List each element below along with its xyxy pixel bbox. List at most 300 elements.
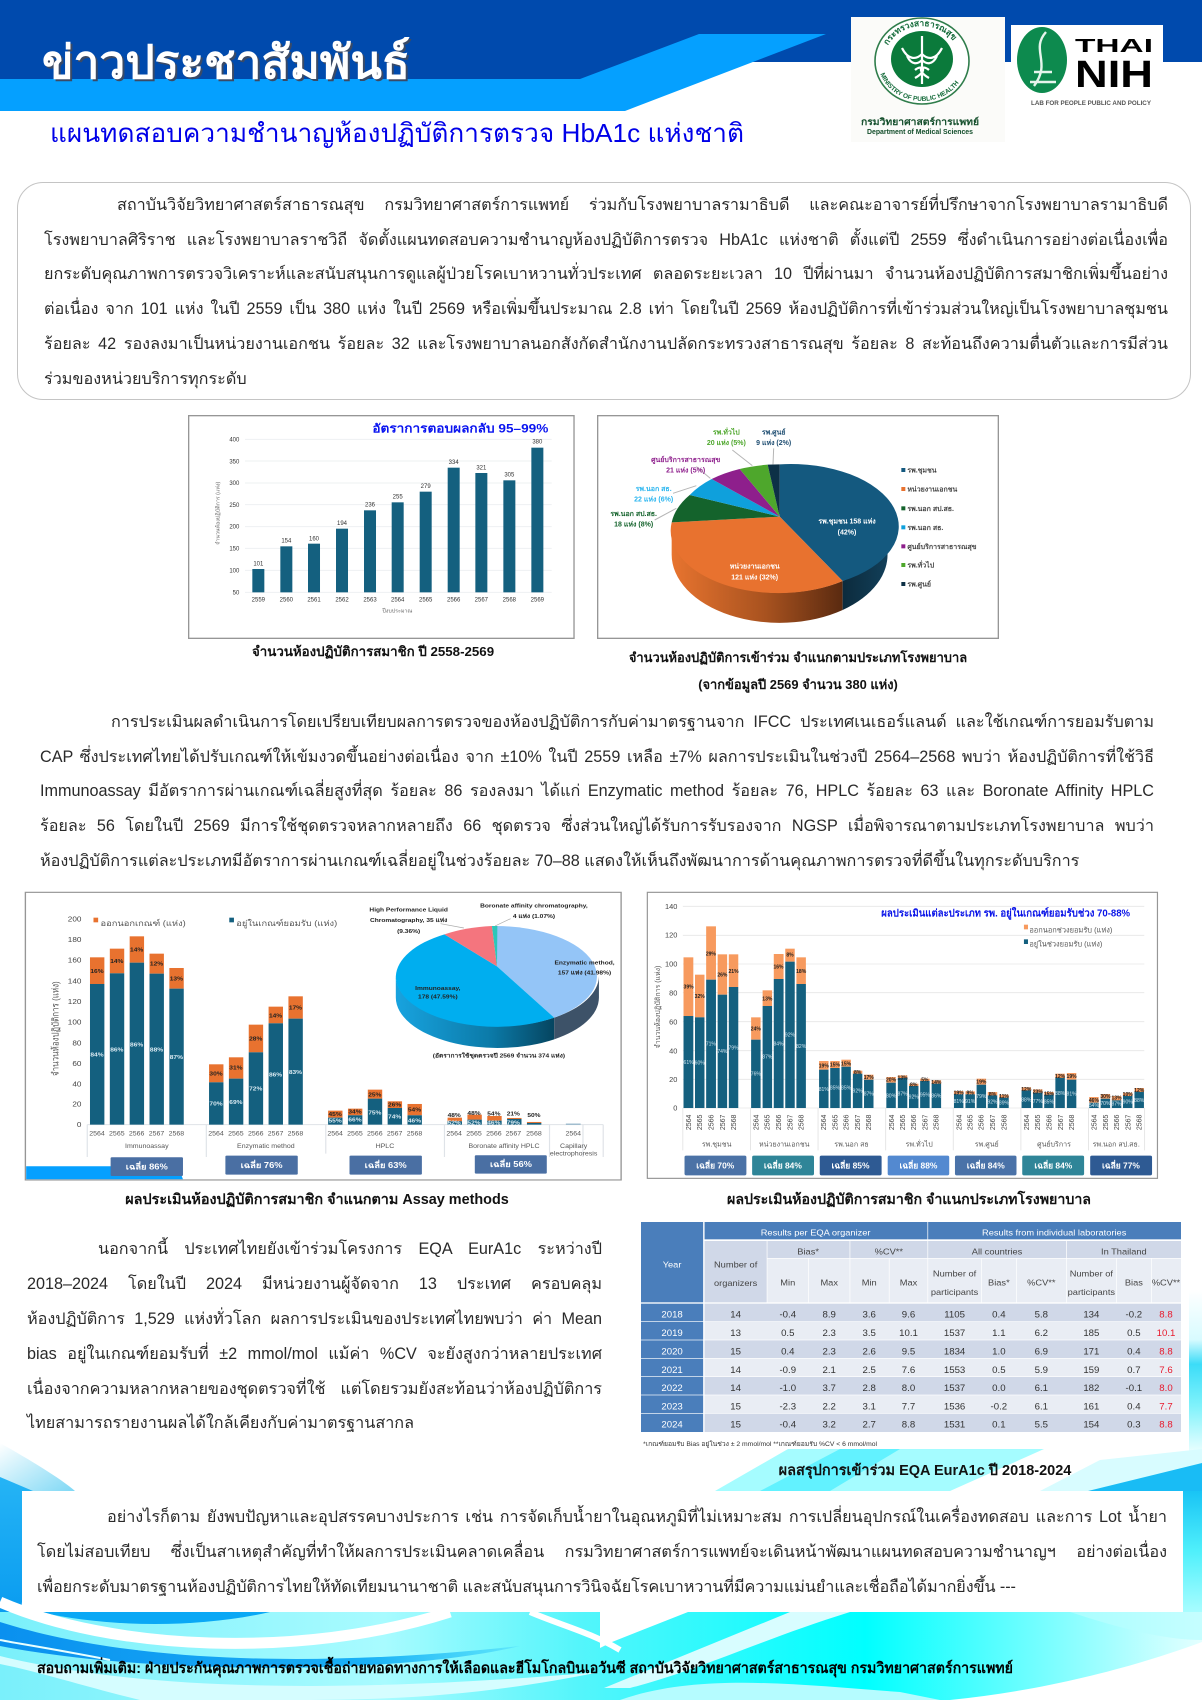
x axis labels bbox=[252, 598, 545, 604]
table header text: Bias* bbox=[988, 1278, 1011, 1287]
bar value labels: 321 bbox=[476, 466, 487, 472]
percent labels out of range: 8% bbox=[854, 1070, 862, 1076]
percent labels out of range: 12% bbox=[1022, 1087, 1032, 1093]
chart: assay methods bbox=[24, 892, 622, 1181]
average boxes: เฉลี่ย 56% bbox=[490, 1157, 532, 1168]
rotated year labels: 2565 bbox=[833, 1114, 840, 1130]
percent labels out of range: 17% bbox=[864, 1075, 875, 1081]
caption: participants by hospital type bbox=[629, 650, 967, 693]
right strip bbox=[1189, 1290, 1202, 1455]
table header text: Number of bbox=[1070, 1268, 1114, 1278]
y axis labels bbox=[67, 915, 81, 1128]
legend: ออกนอกเกณฑ์ (แห่ง) bbox=[100, 918, 186, 928]
y axis labels: 140 bbox=[665, 902, 678, 911]
percent labels out of range bbox=[684, 951, 1145, 1104]
axis titles: จำนวนห้องปฏิบัติการ (แห่ง) bbox=[214, 482, 221, 545]
pie labels: 9 แห่ง (2%) bbox=[756, 439, 792, 447]
panel: EQA EurA1c paragraph: ห้องปฏิบัติการ 1,529 แห่งทั่วโลก ผลการประเมินของประเทศไทยพบว่า ค่า Mean bbox=[27, 1310, 602, 1328]
y axis labels: 120 bbox=[67, 997, 81, 1006]
chart: hospital type evaluation bbox=[646, 892, 1158, 1179]
panel: EQA EurA1c paragraph: 2018–2024 โดยในปี 2024 มีหน่วยงานผู้จัดจาก 13 ประเทศ ครอบคลุม bbox=[27, 1275, 602, 1293]
rotated year labels: 2564 bbox=[686, 1114, 693, 1130]
table rows: -0.4 bbox=[780, 1420, 796, 1429]
percent labels in range: 79% bbox=[506, 1119, 520, 1126]
average boxes: เฉลี่ย 70% bbox=[697, 1158, 735, 1170]
percent labels in range: 81% bbox=[819, 1087, 830, 1093]
x axis years: 2567 bbox=[267, 1130, 283, 1137]
pie labels: รพ.นอก สป.สธ. bbox=[611, 510, 657, 518]
pie labels: รพ.นอก สธ. bbox=[636, 486, 672, 493]
y axis labels bbox=[229, 437, 240, 596]
percent labels in range: 86% bbox=[110, 1047, 124, 1053]
percent labels out of range: 15% bbox=[1044, 1091, 1055, 1097]
x axis labels: 2567 bbox=[475, 598, 489, 604]
y axis labels: 50 bbox=[233, 590, 240, 596]
table rows: 0.4 bbox=[781, 1346, 795, 1356]
table rows: 8.0 bbox=[902, 1383, 916, 1393]
average boxes bbox=[685, 1155, 1152, 1175]
average boxes: เฉลี่ย 76% bbox=[240, 1158, 283, 1169]
panel: evaluation paragraph bbox=[40, 712, 1154, 870]
rotated year labels: 2567 bbox=[720, 1114, 727, 1130]
logo: thai nih: THAI bbox=[1075, 36, 1153, 56]
panel: evaluation paragraph: CAP ซึ่งประเทศไทยได้ปรับเกณฑ์ให้เข้มงวดขึ้นอย่างต่อเนื่อง จาก ±10% ในปี 2559 เหลือ ±7% ผลการประเมินในช่วงปี 2564–2568 พบว่า ห้องปฏิบัติการที่ใช้วิธี bbox=[40, 748, 1154, 766]
logo: ministry of public health bbox=[851, 17, 1005, 136]
percent labels in range: 70% bbox=[1101, 1101, 1111, 1107]
table rows: 8.8 bbox=[1160, 1310, 1173, 1319]
rotated year labels: 2564 bbox=[754, 1114, 761, 1130]
legend: อยู่ในช่วงยอมรับ (แห่ง) bbox=[1030, 939, 1103, 948]
percent labels in range: 69% bbox=[229, 1099, 243, 1106]
percent labels in range: 79% bbox=[729, 1045, 740, 1051]
y axis labels: 60 bbox=[670, 1017, 678, 1026]
percent labels in range: 83% bbox=[289, 1069, 302, 1076]
rotated year labels: 2566 bbox=[709, 1114, 716, 1130]
percent labels in range: 52% bbox=[447, 1120, 461, 1126]
rotated year labels: 2567 bbox=[1126, 1114, 1133, 1130]
logo: thai nih: NIH bbox=[1075, 54, 1153, 96]
y axis labels: 350 bbox=[229, 459, 240, 465]
percent labels in range: 82% bbox=[796, 1044, 807, 1050]
caption: EQA summary: ผลสรุปการเข้าร่วม EQA EurA1c ปี 2018-2024 bbox=[779, 1463, 1071, 1479]
y axis labels: 250 bbox=[229, 503, 240, 509]
y axis labels: 150 bbox=[229, 547, 240, 553]
stacked bars: out of range bbox=[684, 926, 1144, 1102]
banner light blue ribbon bbox=[0, 34, 826, 111]
table rows: 0.4 bbox=[993, 1310, 1006, 1319]
percent labels out of range: 16% bbox=[774, 964, 784, 970]
table rows: 14 bbox=[731, 1310, 741, 1319]
x axis years: 2565 bbox=[109, 1130, 125, 1137]
table header text: All countries bbox=[972, 1247, 1023, 1256]
chart title: อัตราการตอบผลกลับ 95–99% bbox=[372, 422, 549, 436]
table header text bbox=[663, 1228, 1181, 1297]
table rows: 154 bbox=[1084, 1420, 1100, 1429]
legend: ออกนอกช่วงยอมรับ (แห่ง) bbox=[1030, 925, 1113, 934]
table rows: 1.0 bbox=[993, 1346, 1006, 1356]
percent labels in range: 87% bbox=[898, 1091, 909, 1097]
x axis years: 2567 bbox=[148, 1130, 164, 1137]
rotated year labels: 2564 bbox=[889, 1114, 896, 1130]
x axis labels: 2559 bbox=[252, 598, 266, 604]
x axis years: 2564 bbox=[208, 1130, 224, 1137]
percent labels out of range: 19% bbox=[954, 1090, 965, 1096]
x axis labels: 2563 bbox=[363, 598, 377, 604]
method names: Capillary bbox=[560, 1143, 588, 1149]
table rows: 8.0 bbox=[1160, 1383, 1173, 1393]
logo: ministry of public health: MINISTRY OF PUBLIC HEALTH bbox=[880, 72, 959, 101]
table rows: 8.8 bbox=[1160, 1346, 1173, 1356]
x axis labels: 2565 bbox=[419, 598, 433, 604]
table rows: -0.9 bbox=[780, 1365, 796, 1375]
rotated year labels: 2568 bbox=[866, 1114, 874, 1130]
percent labels in range: 92% bbox=[853, 1088, 864, 1094]
percent labels in range: 85% bbox=[1044, 1099, 1055, 1105]
average boxes: เฉลี่ย 84% bbox=[1035, 1158, 1073, 1170]
assay pie labels: 178 (47.59%) bbox=[418, 993, 457, 1000]
percent labels out of range: 14% bbox=[130, 947, 144, 953]
x axis years: 2567 bbox=[505, 1130, 521, 1137]
y axis labels: 20 bbox=[72, 1100, 81, 1108]
header banner bbox=[0, 0, 1202, 111]
x axis years: 2568 bbox=[168, 1130, 184, 1137]
x axis years: 2565 bbox=[466, 1130, 482, 1137]
pie labels: รพ.ชุมชน 158 แห่ง bbox=[819, 518, 877, 526]
y axis labels: 120 bbox=[665, 930, 678, 939]
hospital type names: รพ.นอก สป.สธ. bbox=[1093, 1141, 1140, 1148]
panel: EQA EurA1c paragraph bbox=[26, 1237, 602, 1432]
axis titles: ปีงบประมาณ bbox=[382, 607, 412, 614]
x axis years bbox=[89, 1130, 581, 1137]
rotated year labels: 2565 bbox=[765, 1114, 772, 1130]
legend: ศูนย์บริการสาธารณสุข bbox=[908, 542, 977, 552]
hospital type names: ศูนย์บริการ bbox=[1037, 1140, 1072, 1148]
percent labels in range: 88% bbox=[1135, 1098, 1145, 1104]
method names: HPLC bbox=[375, 1143, 394, 1149]
percent labels out of range: 13% bbox=[1112, 1095, 1123, 1101]
rotated year labels: 2567 bbox=[1058, 1114, 1065, 1130]
table rows: 6.1 bbox=[1035, 1402, 1048, 1411]
table rows: 3.5 bbox=[863, 1328, 876, 1338]
percent labels out of range: 19% bbox=[819, 1063, 830, 1069]
pie labels bbox=[611, 426, 877, 581]
table rows: 2023 bbox=[662, 1402, 683, 1411]
table rows: 3.2 bbox=[823, 1420, 836, 1429]
percent labels in range: 71% bbox=[706, 1041, 717, 1047]
table rows: 0.4 bbox=[1128, 1346, 1141, 1356]
stacked bars: out of range bbox=[90, 936, 541, 1123]
table rows: 1105 bbox=[945, 1310, 965, 1319]
table header text: participants bbox=[931, 1287, 979, 1297]
y axis labels: 0 bbox=[77, 1120, 81, 1128]
x axis years: 2566 bbox=[486, 1130, 502, 1137]
rotated year labels: 2566 bbox=[911, 1114, 918, 1130]
table rows: 14 bbox=[731, 1383, 741, 1393]
table rows: 8.8 bbox=[902, 1420, 916, 1429]
percent labels out of range: 12% bbox=[1135, 1088, 1145, 1094]
rotated year labels: 2564 bbox=[822, 1114, 829, 1130]
y axis labels: 160 bbox=[67, 956, 81, 964]
x axis years: 2565 bbox=[228, 1130, 244, 1137]
percent labels out of range: 14% bbox=[932, 1080, 942, 1086]
axis lines bbox=[87, 1124, 603, 1157]
rotated year labels: 2565 bbox=[900, 1114, 907, 1130]
legend bbox=[902, 468, 977, 590]
table rows: 7.7 bbox=[1160, 1402, 1173, 1411]
x axis years: 2568 bbox=[287, 1130, 303, 1137]
table rows: -0.2 bbox=[991, 1402, 1008, 1411]
panel: evaluation paragraph: ร้อยละ 56 โดยในปี 2569 มีการใช้ชุดตรวจหลากหลายถึง 66 ชุดตรวจ ซึ่งส่วนใหญ่ได้รับการรับรองจาก NGSP เมื่อพิจารณาตามประเภทโรงพยาบาล พบว่า bbox=[40, 817, 1154, 835]
table rows: -0.2 bbox=[1126, 1310, 1143, 1319]
caption: participants by hospital type: (จากข้อมูลปี 2569 จำนวน 380 แห่ง) bbox=[698, 677, 898, 692]
table rows: 1536 bbox=[944, 1402, 966, 1411]
legend bbox=[93, 917, 337, 928]
rotated year labels: 2568 bbox=[1137, 1114, 1144, 1130]
rotated year labels: 2565 bbox=[1036, 1114, 1043, 1130]
footer contact: สอบถามเพิ่มเติม: ฝ่ายประกันคุณภาพการตรวจเชื้อถ่ายทอดทางการให้เลือดและฮีโมโกลบินเอวันซี สถาบันวิจัยวิทยาศาสตร์สาธารณสุข กรมวิทยาศาสตร์การแพทย์ bbox=[37, 1656, 1013, 1678]
assay pie labels: Enzymatic method, bbox=[554, 959, 615, 966]
percent labels in range: 76% bbox=[751, 1071, 762, 1077]
table rows: 0.0 bbox=[993, 1383, 1006, 1393]
table rows: 7.6 bbox=[1160, 1365, 1173, 1375]
caption: participants by hospital type: จำนวนห้องปฏิบัติการเข้าร่วม จำแนกตามประเภทโรงพยาบาล bbox=[629, 650, 967, 665]
table rows: 1553 bbox=[944, 1365, 966, 1375]
percent labels in range: 52% bbox=[467, 1119, 481, 1126]
table rows: 7.6 bbox=[902, 1365, 916, 1375]
lower swirl base bbox=[0, 1612, 1202, 1700]
x axis years: 2567 bbox=[387, 1130, 403, 1137]
pie labels: 18 แห่ง (8%) bbox=[614, 520, 653, 528]
x axis years: 2564 bbox=[446, 1130, 462, 1137]
x axis labels: 2564 bbox=[391, 598, 405, 604]
logo: ministry of public health: Department of Medical Sciences bbox=[867, 129, 973, 136]
rotated year labels: 2567 bbox=[788, 1114, 795, 1130]
table rows: 2.3 bbox=[823, 1346, 836, 1356]
percent labels out of range: 54% bbox=[408, 1107, 421, 1113]
table rows: 2.7 bbox=[863, 1420, 876, 1429]
chart title: ผลประเมินแต่ละประเภท รพ. อยู่ในเกณฑ์ยอมรับช่วง 70-88% bbox=[882, 906, 1130, 920]
table header text: Max bbox=[900, 1278, 918, 1287]
percent labels out of range: 48% bbox=[447, 1112, 461, 1118]
table header text: organizers bbox=[714, 1278, 758, 1288]
percent labels in range: 84% bbox=[774, 1041, 784, 1047]
panel: intro paragraph: โรงพยาบาลศิริราช และโรงพยาบาลราชวิถี จัดตั้งแผนทดสอบความชำนาญห้องปฏิบัติการตรวจ HbA1c แห่งชาติ ตั้งแต่ปี 2559 ซึ่งดำเนินการอย่างต่อเนื่องเพื่อ bbox=[44, 231, 1168, 249]
legend: รพ.ทั่วไป bbox=[908, 560, 935, 570]
y axis labels: 200 bbox=[229, 525, 240, 531]
percent labels in range: 66% bbox=[348, 1117, 362, 1123]
table rows: 15 bbox=[731, 1420, 741, 1429]
x axis labels: 2562 bbox=[335, 598, 349, 604]
table: EQA EurA1c results bbox=[641, 1222, 1181, 1448]
percent labels out of range: 15% bbox=[841, 1061, 852, 1067]
x axis labels: 2561 bbox=[307, 598, 321, 604]
table rows: 2024 bbox=[662, 1420, 683, 1429]
x axis years: 2566 bbox=[248, 1130, 264, 1137]
table rows: 2.8 bbox=[863, 1383, 876, 1393]
percent labels in range: 92% bbox=[909, 1094, 920, 1100]
percent labels in range: 87% bbox=[1112, 1101, 1123, 1107]
bar value labels: 236 bbox=[365, 503, 376, 509]
percent labels in range: 86% bbox=[932, 1093, 942, 1099]
pie labels: รพ.ทั่วไป bbox=[713, 426, 741, 436]
assay pie labels: Chromatography, 35 แห่ง bbox=[370, 917, 447, 924]
percent labels out of range: 16% bbox=[90, 968, 104, 975]
chart: member laboratories by year bbox=[188, 415, 575, 639]
bars bbox=[252, 448, 543, 592]
legend: อยู่ในเกณฑ์ยอมรับ (แห่ง) bbox=[236, 918, 337, 928]
percent labels out of range: 9% bbox=[967, 1090, 975, 1096]
table header text: participants bbox=[1068, 1287, 1116, 1297]
percent labels out of range: 14% bbox=[110, 958, 124, 965]
panel: evaluation paragraph: ห้องปฏิบัติการแต่ละประเภทมีอัตราการผ่านเกณฑ์เฉลี่ยอยู่ในช่วงร้อยละ 70–88 แสดงให้เห็นถึงพัฒนาการด้านคุณภาพการตรวจที่ดีขึ้นในทุกระดับบริการ bbox=[40, 852, 1079, 870]
pie labels: รพ.ศูนย์ bbox=[762, 427, 786, 437]
rotated year labels: 2566 bbox=[979, 1114, 986, 1130]
percent labels out of range: 21% bbox=[506, 1111, 520, 1117]
percent labels in range: 91% bbox=[966, 1099, 976, 1105]
average boxes: เฉลี่ย 86% bbox=[125, 1160, 168, 1171]
percent labels out of range: 30% bbox=[209, 1070, 223, 1077]
pie chart bbox=[671, 464, 899, 623]
average boxes: เฉลี่ย 63% bbox=[364, 1158, 407, 1169]
legend: หน่วยงานเอกชน bbox=[908, 486, 958, 494]
table rows: 2022 bbox=[662, 1383, 683, 1393]
table footnote: *เกณฑ์ยอมรับ Bias อยู่ในช่วง ± 2 mmol/mol **เกณฑ์ยอมรับ %CV < 6 mmol/mol bbox=[644, 1440, 878, 1448]
assay pie labels: High Performance Liquid bbox=[369, 907, 448, 913]
rotated year labels: 2568 bbox=[799, 1114, 806, 1130]
assay pie labels: 4 แห่ง (1.07%) bbox=[513, 913, 555, 920]
x axis labels: 2568 bbox=[503, 598, 517, 604]
assay pie labels: (9.36%) bbox=[397, 928, 420, 935]
percent labels out of range: 26% bbox=[388, 1102, 402, 1108]
caption: member laboratories: จำนวนห้องปฏิบัติการสมาชิก ปี 2558-2569 bbox=[252, 644, 494, 659]
left upper glow bbox=[0, 1443, 75, 1491]
panel: EQA EurA1c paragraph: bias อยู่ในเกณฑ์ยอมรับที่ ±2 mmol/mol แม้ค่า %CV จะยังสูงกว่าหลายประเทศ bbox=[27, 1345, 602, 1363]
table rows bbox=[662, 1310, 1176, 1429]
percent labels out of range: 13% bbox=[763, 996, 773, 1002]
rotated year labels: 2568 bbox=[1002, 1114, 1009, 1130]
table rows: 2.5 bbox=[863, 1365, 876, 1375]
y axis labels: 400 bbox=[229, 437, 240, 443]
percent labels out of range: 46% bbox=[1089, 1098, 1100, 1104]
percent labels in range: 46% bbox=[487, 1120, 501, 1126]
percent labels out of range: 30% bbox=[1101, 1094, 1111, 1100]
legend: รพ.ศูนย์ bbox=[908, 580, 931, 590]
percent labels out of range: 17% bbox=[289, 1005, 302, 1011]
y axis labels: 80 bbox=[72, 1039, 81, 1047]
percent labels in range: 88% bbox=[150, 1047, 163, 1053]
percent labels in range: 87% bbox=[864, 1091, 875, 1097]
y axis labels bbox=[665, 902, 678, 1112]
y axis title: จำนวนห้องปฏิบัติการ (แห่ง) bbox=[50, 981, 60, 1076]
panel: evaluation paragraph: การประเมินผลดำเนินการโดยเปรียบเทียบผลการตรวจของห้องปฏิบัติการกับค่ามาตรฐานจาก IFCC ประเทศเนเธอร์แลนด์ และใช้เกณฑ์การยอมรับตาม bbox=[111, 713, 1154, 731]
bar value labels: 305 bbox=[504, 473, 515, 479]
table rows: 171 bbox=[1084, 1346, 1100, 1356]
table rows: 2019 bbox=[662, 1328, 683, 1338]
method names: Immunoassay bbox=[125, 1143, 169, 1149]
table row stripes bbox=[641, 1303, 1181, 1432]
percent labels in range: 92% bbox=[988, 1099, 998, 1105]
x axis labels: 2566 bbox=[447, 598, 461, 604]
percent labels in range: 72% bbox=[249, 1086, 263, 1092]
table rows: 1537 bbox=[944, 1383, 966, 1393]
logo: ministry of public health: กรมวิทยาศาสตร์การแพทย์ bbox=[861, 116, 979, 128]
average boxes bbox=[110, 1155, 546, 1176]
table rows: 1537 bbox=[944, 1328, 966, 1338]
page title shadow: ข่าวประชาสัมพันธ์ bbox=[44, 38, 412, 90]
bar value labels: 334 bbox=[449, 460, 459, 466]
percent labels out of range: 8% bbox=[787, 952, 795, 958]
table rows: 0.1 bbox=[993, 1420, 1006, 1429]
percent labels in range: 88% bbox=[1022, 1097, 1032, 1103]
percent labels out of range: 10% bbox=[1123, 1092, 1134, 1098]
pie labels: หน่วยงานเอกชน bbox=[730, 563, 780, 571]
percent labels in range: 89% bbox=[999, 1100, 1010, 1106]
y axis labels: 60 bbox=[72, 1059, 81, 1068]
percent labels out of range: 45% bbox=[328, 1111, 342, 1117]
legend: รพ.นอก สธ. bbox=[908, 525, 944, 532]
rotated year labels: 2564 bbox=[1024, 1114, 1031, 1130]
x axis years: 2568 bbox=[526, 1130, 542, 1137]
percent labels out of range: 18% bbox=[796, 969, 807, 975]
table rows: -0.1 bbox=[1126, 1383, 1143, 1393]
table rows: 5.8 bbox=[1035, 1310, 1048, 1319]
table rows: 0.3 bbox=[1128, 1420, 1141, 1429]
percent labels out of range: 48% bbox=[467, 1110, 481, 1116]
percent labels out of range: 50% bbox=[527, 1112, 541, 1118]
percent labels in range: 86% bbox=[269, 1071, 282, 1078]
percent labels in range bbox=[90, 1042, 520, 1126]
x axis years: 2565 bbox=[347, 1130, 363, 1137]
rotated year labels: 2567 bbox=[923, 1114, 930, 1130]
assay pie labels: 157 แห่ง (41.98%) bbox=[558, 970, 611, 976]
table rows: 3.1 bbox=[863, 1402, 876, 1411]
table rows: 182 bbox=[1084, 1383, 1100, 1393]
table rows: 9.5 bbox=[902, 1346, 916, 1356]
percent labels in range: 92% bbox=[785, 1032, 796, 1038]
percent labels out of range: 21% bbox=[729, 969, 740, 975]
percent labels in range: 61% bbox=[684, 1060, 695, 1066]
bar value labels: 380 bbox=[532, 440, 543, 446]
percent labels out of range: 15% bbox=[830, 1062, 841, 1068]
table rows: 13 bbox=[731, 1328, 741, 1338]
table rows: 2.6 bbox=[863, 1346, 876, 1356]
table header text: Bias bbox=[1125, 1278, 1144, 1287]
percent labels out of range: 31% bbox=[229, 1065, 243, 1071]
percent labels out of range bbox=[90, 947, 541, 1118]
method names bbox=[125, 1143, 598, 1157]
rotated year labels: 2566 bbox=[1047, 1114, 1054, 1130]
panel: conclusion box bbox=[22, 1491, 1183, 1612]
panel: conclusion box: อย่างไรก็ตาม ยังพบปัญหาและอุปสรรคบางประการ เช่น การจัดเก็บน้ำยาในอุณหภูมิที่ไม่เหมาะสม การเปลี่ยนอุปกรณ์ในเครื่องทดสอบ และการ Lot น้ำยา bbox=[107, 1508, 1167, 1526]
table rows: 0.7 bbox=[1128, 1365, 1141, 1375]
pie labels: 121 แห่ง (32%) bbox=[732, 573, 778, 581]
table rows: -1.0 bbox=[780, 1383, 796, 1393]
percent labels in range: 70% bbox=[209, 1101, 223, 1107]
table rows: 159 bbox=[1084, 1365, 1100, 1375]
pie labels: (42%) bbox=[838, 529, 857, 536]
percent labels out of range: 19% bbox=[977, 1079, 987, 1085]
method names: electrophoresis bbox=[550, 1151, 598, 1157]
panel: intro paragraph: สถาบันวิจัยวิทยาศาสตร์สาธารณสุข กรมวิทยาศาสตร์การแพทย์ ร่วมกับโรงพยาบาลรามาธิบดี และคณะอาจารย์ที่ปรึกษาจากโรงพยาบาลรามาธิบดี bbox=[117, 196, 1168, 214]
bar value labels: 154 bbox=[281, 539, 292, 545]
table rows: 2021 bbox=[662, 1365, 683, 1375]
rotated year labels: 2567 bbox=[991, 1114, 998, 1130]
legend: รพ.ชุมชน bbox=[908, 468, 937, 475]
y axis labels: 0 bbox=[674, 1103, 678, 1112]
y axis labels: 200 bbox=[67, 915, 81, 923]
rotated year labels: 2564 bbox=[1092, 1114, 1099, 1130]
x axis years: 2564 bbox=[89, 1130, 105, 1137]
